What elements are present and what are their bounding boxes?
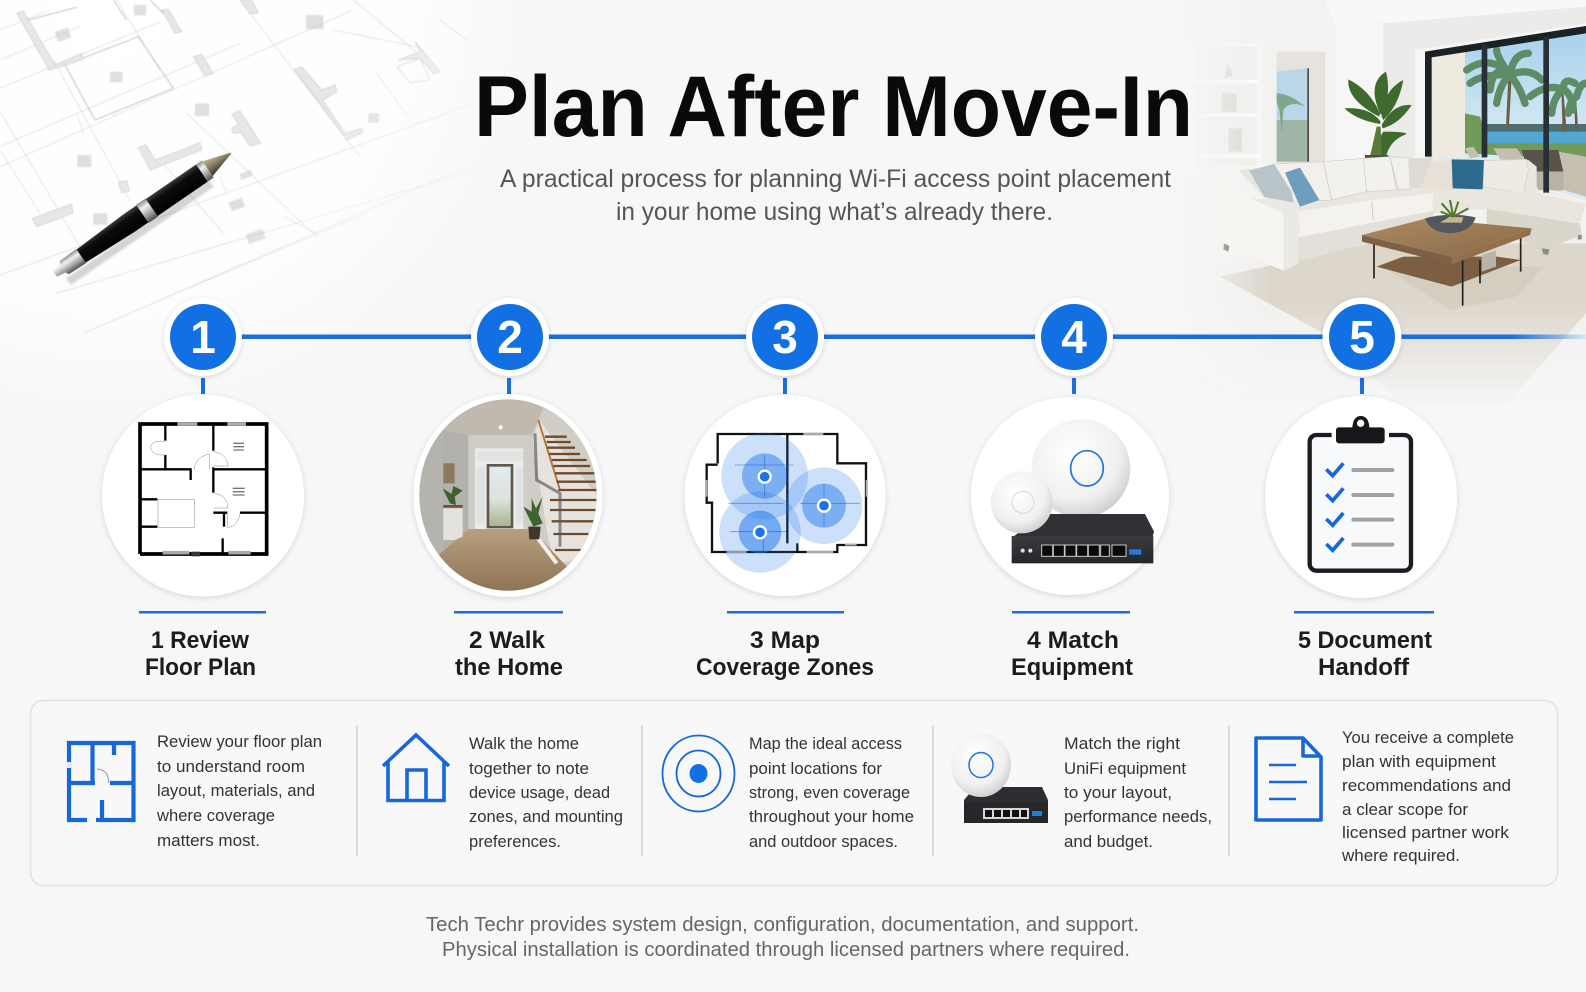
text: review floor plan <box>156 733 322 850</box>
sub: plant <box>1344 72 1412 159</box>
icon: access point and switch <box>951 733 1048 823</box>
text: match equipment: performance needs, <box>1064 808 1212 826</box>
text: match equipment: to your layout, <box>1064 784 1172 802</box>
step 2 label <box>454 611 563 681</box>
illustration: coverage map <box>684 395 886 596</box>
text: map coverage: strong, even coverage <box>749 784 910 802</box>
text: map coverage: throughout your home <box>749 808 914 826</box>
step 3 label: Coverage Zones <box>696 654 874 681</box>
text: walk the home: device usage, dead <box>469 784 610 802</box>
icon: document <box>1256 738 1321 820</box>
icon: floor plan <box>69 743 134 820</box>
text: match equipment: and budget. <box>1064 833 1153 851</box>
text: walk the home: together to note <box>469 760 589 778</box>
icon: house <box>383 735 449 800</box>
step 3 marker <box>746 298 824 376</box>
text: document handoff: recommendations and <box>1342 777 1511 795</box>
text: document handoff: a clear scope for <box>1342 801 1469 819</box>
illustration: walk-through photo of hallway <box>414 394 602 597</box>
text: review floor plan: Review your floor plan <box>157 733 322 751</box>
text: document handoff: licensed partner work <box>1342 824 1510 842</box>
step 2 label: 2 Walk <box>469 627 546 654</box>
step 4 marker: 4 <box>1061 311 1087 363</box>
text: review floor plan: to understand room <box>157 758 305 776</box>
step 1 label: Floor Plan <box>145 654 256 681</box>
sub: window and view <box>1432 33 1586 200</box>
subtitle: A practical process for planning Wi-Fi access point placement <box>500 165 1171 193</box>
text: walk the home: zones, and mounting <box>469 808 623 826</box>
footer note: Tech Techr provides system design, configuration, documentation, and support. <box>426 913 1139 936</box>
step 5 marker: 5 <box>1349 311 1375 363</box>
footer note <box>426 913 1139 961</box>
subtitle <box>500 165 1171 226</box>
step 5 label: Handoff <box>1318 654 1410 681</box>
text: document handoff: where required. <box>1341 847 1460 865</box>
photo: living room <box>1220 6 1586 388</box>
footer note: Physical installation is coordinated through licensed partners where required. <box>442 938 1130 961</box>
text: map coverage: point locations for <box>749 760 883 778</box>
sub: coffee table <box>1362 200 1532 306</box>
panel: step details <box>30 700 1558 886</box>
step 2 marker <box>471 298 549 376</box>
subtitle: in your home using what’s already there. <box>616 198 1053 226</box>
text: document handoff <box>1341 729 1514 865</box>
step 1 marker <box>164 298 242 376</box>
text: document handoff: You receive a complete <box>1342 729 1514 747</box>
step 2 marker: 2 <box>497 311 523 363</box>
step 2 label: the Home <box>455 654 563 681</box>
text: match equipment: UniFi equipment <box>1064 760 1186 778</box>
step 5 label <box>1294 611 1434 681</box>
step 3 label: 3 Map <box>750 627 820 654</box>
text: walk the home: Walk the home <box>469 735 579 753</box>
text: walk the home: preferences. <box>469 833 561 851</box>
step 5 marker <box>1322 298 1402 376</box>
step 3 label <box>696 611 874 681</box>
step 1 label: 1 Review <box>151 627 249 654</box>
sub: sofa <box>1218 157 1586 271</box>
text: map coverage: and outdoor spaces. <box>749 833 898 851</box>
text: match equipment: Match the right <box>1064 735 1180 753</box>
step 1 label <box>139 611 266 681</box>
step 4 label: Equipment <box>1011 654 1133 681</box>
sub: door <box>1277 52 1325 163</box>
step 4 label <box>1011 611 1133 681</box>
timeline connector <box>201 334 1586 394</box>
step 5 label: 5 Document <box>1298 627 1432 654</box>
photo: blueprint with pen <box>0 0 464 334</box>
text: review floor plan: where coverage <box>156 807 275 825</box>
icon: target rings <box>662 736 734 812</box>
step 4 label: 4 Match <box>1027 627 1119 654</box>
text: walk the home <box>469 735 623 851</box>
title: Plan After Move-In <box>474 59 1193 155</box>
illustration: floor plan <box>102 394 304 596</box>
text: map coverage <box>749 735 914 851</box>
illustration: clipboard checklist <box>1265 396 1457 598</box>
step 4 marker <box>1035 298 1113 376</box>
text: review floor plan: layout, materials, and <box>157 782 315 800</box>
text: map coverage: Map the ideal access <box>749 735 902 753</box>
text: document handoff: plan with equipment <box>1342 753 1496 771</box>
text: match equipment <box>1064 735 1212 851</box>
sub: rug <box>1220 243 1586 382</box>
icon: pen <box>49 144 241 289</box>
step 3 marker: 3 <box>772 311 798 363</box>
step 1 marker: 1 <box>190 311 216 363</box>
illustration: access points and switch <box>971 397 1169 595</box>
text: review floor plan: matters most. <box>157 832 260 850</box>
